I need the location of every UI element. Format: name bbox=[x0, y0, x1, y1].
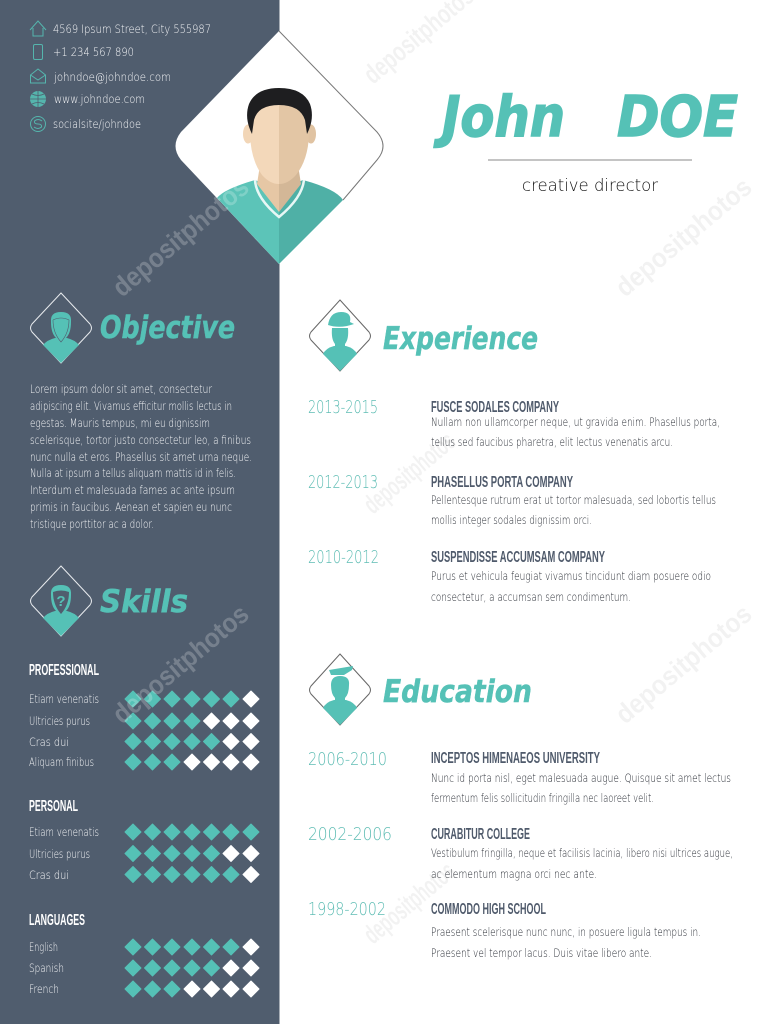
objective text bbox=[30, 382, 252, 531]
watermarks: depositphotos bbox=[358, 856, 461, 950]
heading: education: Education bbox=[383, 674, 532, 710]
entry: 2010-2012: consectetur, a accumsan sem condimentum. bbox=[431, 590, 631, 604]
watermarks: depositphotos bbox=[107, 172, 255, 303]
entry: 2012-2013 bbox=[308, 472, 716, 527]
entry: 2012-2013: mollis integer sodales dignissim orci. bbox=[431, 513, 592, 527]
heading: experience: Experience bbox=[383, 321, 538, 357]
entry: 1998-2002: COMMODO HIGH SCHOOL bbox=[431, 901, 546, 918]
objective text: Nulla at ipsum a tellus aliquam mattis id in felis. bbox=[30, 466, 236, 480]
watermarks: depositphotos bbox=[358, 426, 461, 520]
objective text: nunc nulla et eros. Phasellus sit amet urna neque. bbox=[30, 450, 252, 464]
job title: creative director bbox=[522, 176, 658, 196]
skill row bbox=[29, 734, 259, 750]
entry: 2010-2012 bbox=[308, 547, 711, 604]
icon: social bbox=[30, 116, 46, 132]
entry: 2013-2015: FUSCE SODALES COMPANY bbox=[431, 399, 559, 416]
watermarks: depositphotos bbox=[610, 172, 758, 303]
skill row bbox=[29, 981, 259, 997]
watermarks: depositphotos bbox=[107, 599, 255, 730]
objective text: Interdum et malesuada fames ac ante ipsum bbox=[30, 483, 235, 497]
objective text: primis in faucibus. Aenean et sapien eu nunc bbox=[30, 500, 232, 514]
objective text: tristique porttitor ac a dolor. bbox=[30, 517, 154, 531]
name: John bbox=[433, 85, 565, 150]
skill row: Ultricies purus bbox=[29, 714, 90, 728]
skill row: Cras dui bbox=[29, 868, 69, 882]
heading: objective: Objective bbox=[100, 310, 235, 346]
icon: mail bbox=[30, 69, 46, 83]
entry: 2002-2006: ac elementum magna orci nec ante. bbox=[431, 867, 597, 881]
skill row bbox=[29, 866, 259, 882]
entry: 2013-2015: tellus sed faucibus pharetra, elit lectus venenatis arcu. bbox=[431, 435, 673, 449]
skill row: Aliquam finibus bbox=[29, 755, 94, 769]
icon: objective person bbox=[30, 293, 92, 363]
watermarks bbox=[107, 0, 758, 950]
objective text: Lorem ipsum dolor sit amet, consectetur bbox=[30, 382, 212, 396]
skill row bbox=[29, 846, 259, 862]
entry: 2010-2012: 2010-2012 bbox=[308, 547, 379, 568]
skill row bbox=[29, 939, 259, 955]
skill row: French bbox=[29, 982, 59, 996]
entry: 2002-2006: CURABITUR COLLEGE bbox=[431, 826, 530, 843]
entry: 2013-2015 bbox=[308, 397, 720, 449]
entry: 2006-2010 bbox=[308, 749, 731, 805]
portrait diamond bbox=[176, 31, 383, 264]
skill row bbox=[29, 713, 259, 729]
experience entries bbox=[308, 397, 720, 604]
skill row: Ultricies purus bbox=[29, 847, 90, 861]
heading: skills: Skills bbox=[100, 584, 188, 620]
entry: 2006-2010: fermentum felis sollicitudin fringilla nec laoreet velit. bbox=[431, 791, 654, 805]
skill row bbox=[29, 691, 259, 707]
entry: 1998-2002: 1998-2002 bbox=[308, 899, 386, 920]
icon: experience person with hard hat bbox=[310, 300, 370, 371]
phone number: +1 234 567 890 bbox=[53, 45, 134, 59]
website: www.johndoe.com bbox=[54, 92, 145, 106]
skills: languages: LANGUAGES bbox=[29, 912, 85, 929]
icon: skills person: ? bbox=[56, 593, 66, 610]
entry: 2012-2013: 2012-2013 bbox=[308, 472, 378, 493]
icon: phone bbox=[34, 44, 42, 60]
social handle: socialsite/johndoe bbox=[53, 117, 141, 131]
panel: left sidebar bbox=[0, 0, 280, 1024]
entry: 1998-2002: Praesent vel tempor lacus. Duis vitae libero ante. bbox=[431, 946, 652, 960]
objective text: egestas. Mauris tempus, mi eu dignissim bbox=[30, 416, 210, 430]
skill row: Cras dui bbox=[29, 735, 69, 749]
skills: personal: PERSONAL bbox=[29, 798, 78, 815]
email: johndoe@johndoe.com bbox=[53, 70, 171, 84]
name: DOE bbox=[617, 85, 738, 150]
entry: 2006-2010: INCEPTOS HIMENAEOS UNIVERSITY bbox=[431, 750, 600, 767]
skill row: Etiam venenatis bbox=[29, 825, 99, 839]
icon: education person with cap bbox=[310, 654, 370, 725]
entry: 2002-2006 bbox=[308, 824, 733, 881]
contact list bbox=[30, 21, 211, 132]
skill row: Spanish bbox=[29, 961, 64, 975]
icon: avatar bbox=[217, 88, 343, 264]
skill row bbox=[29, 960, 259, 976]
objective text: adipiscing elit. Vivamus efficitur mollis lectus in bbox=[30, 399, 232, 413]
entry: 2006-2010: 2006-2010 bbox=[308, 749, 387, 770]
skills: professional bbox=[29, 662, 259, 770]
entry: 2013-2015: 2013-2015 bbox=[308, 397, 378, 418]
entry: 2012-2013: PHASELLUS PORTA COMPANY bbox=[431, 474, 573, 491]
skills: professional: PROFESSIONAL bbox=[29, 662, 99, 679]
name bbox=[433, 85, 738, 150]
entry: 1998-2002 bbox=[308, 899, 701, 960]
skills: languages bbox=[29, 912, 259, 997]
icon: house bbox=[30, 21, 46, 36]
skill row bbox=[29, 824, 259, 840]
skill row: Etiam venenatis bbox=[29, 692, 99, 706]
watermarks: depositphotos bbox=[610, 599, 758, 730]
icon: skills person bbox=[30, 566, 92, 636]
skills: personal bbox=[29, 798, 259, 882]
icon: globe bbox=[30, 91, 46, 107]
entry: 2010-2012: SUSPENDISSE ACCUMSAM COMPANY bbox=[431, 549, 605, 566]
address: 4569 Ipsum Street, City 555987 bbox=[53, 22, 211, 36]
skill row bbox=[29, 754, 259, 770]
objective text: scelerisque, tortor justo consectetur leo, a finibus bbox=[30, 433, 251, 447]
education entries bbox=[308, 749, 733, 960]
skill row: English bbox=[29, 940, 58, 954]
entry: 2002-2006: 2002-2006 bbox=[308, 824, 392, 845]
